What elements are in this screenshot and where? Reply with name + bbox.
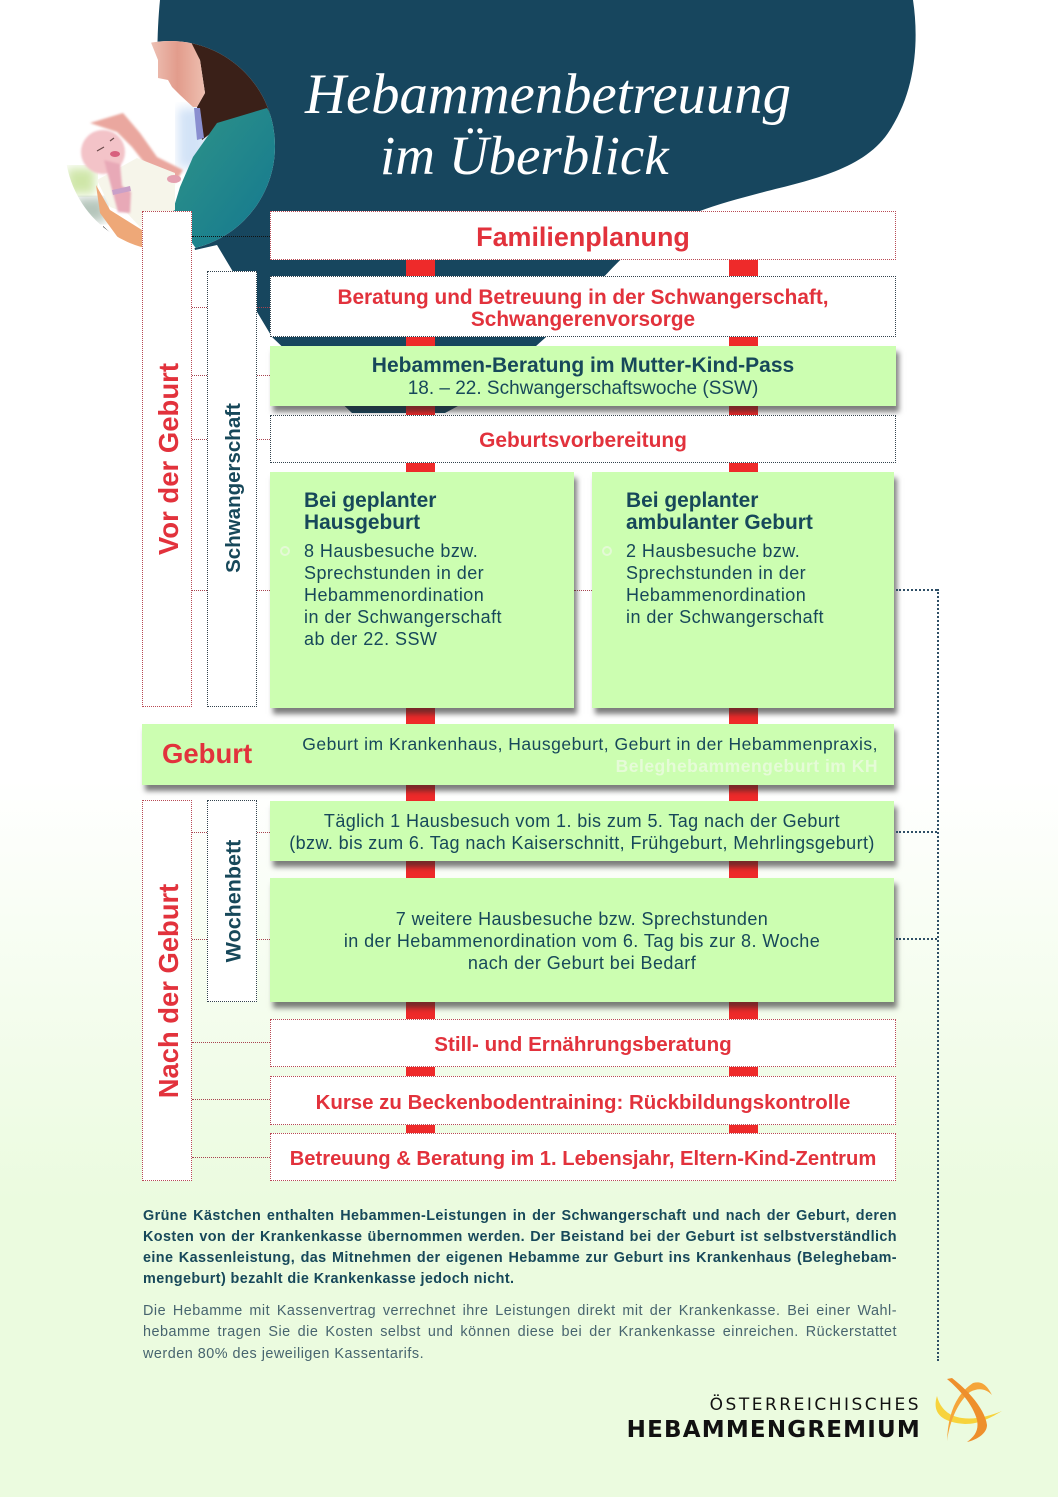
title xyxy=(304,63,791,186)
box: 7 weitere Hausbesuche: in der Hebammenordination vom 6. Tag bis zur 8. Woche xyxy=(344,931,820,951)
box: Hebammen-Beratung: Hebammen-Beratung im Mutter-Kind-Pass xyxy=(372,354,794,377)
box: tägliche Hausbesuche xyxy=(270,801,894,861)
heading: Geburt: Geburt xyxy=(162,738,252,769)
box: Beratung und Betreuung: Schwangerenvorsorge xyxy=(471,308,695,331)
header blob xyxy=(158,0,916,413)
box: Beratung und Betreuung: Beratung und Betreuung in der Schwangerschaft, xyxy=(337,286,829,309)
heading: ambulante Geburt: ambulanter Geburt xyxy=(626,511,813,534)
text: cost note xyxy=(143,1303,897,1362)
heading: Hausgeburt: Bei geplanter xyxy=(304,489,436,512)
icon: bullet xyxy=(280,546,290,556)
text: bold note: eine Kassenleistung, das Mitnehmen der eigenen Hebamme zur Geburt ins Krankenhaus (Beleghebam- xyxy=(143,1250,897,1266)
title: im Überblick xyxy=(380,125,669,186)
panel: geplante Hausgeburt xyxy=(270,472,574,708)
box: Geburtsvorbereitung: Geburtsvorbereitung xyxy=(479,429,687,452)
text: cost note: Die Hebamme mit Kassenvertrag verrechnet ihre Leistungen direkt mit der Krankenkasse. Bei einer Wahl- xyxy=(143,1303,897,1319)
box: Betreuung xyxy=(270,1133,896,1181)
side panel: Vor der Geburt: Vor der Geburt xyxy=(153,363,184,555)
text: Hausgeburt xyxy=(304,541,502,649)
box: Kurse xyxy=(270,1076,896,1125)
heading: ambulante Geburt xyxy=(626,489,813,534)
text: bold note: Kosten von der Krankenkasse übernommen werden. Der Beistand bei der Geburt ist selbstverständlich xyxy=(143,1229,897,1245)
text: Hausgeburt: in der Schwangerschaft xyxy=(304,607,502,627)
side panel: Nach der Geburt xyxy=(142,800,192,1181)
text: ambulante Geburt: Hebammenordination xyxy=(626,585,806,605)
box: Geburtsvorbereitung xyxy=(270,415,896,463)
logo text: HEBAMMENGREMIUM xyxy=(627,1417,921,1443)
box: Familienplanung xyxy=(270,211,896,260)
box: Betreuung: Betreuung & Beratung im 1. Lebensjahr, Eltern-Kind-Zentrum xyxy=(290,1148,876,1170)
heading: Hausgeburt: Hausgeburt xyxy=(304,511,420,534)
text: Geburt options xyxy=(302,734,878,776)
side panel: Vor der Geburt xyxy=(142,211,192,707)
side panel: Nach der Geburt: Nach der Geburt xyxy=(153,884,184,1098)
text: bold note: Grüne Kästchen enthalten Hebammen-Leistungen in der Schwangerschaft und nach der Geburt, deren xyxy=(143,1208,897,1224)
photo: midwife with newborn xyxy=(67,41,275,248)
text: cost note: werden 80% des jeweiligen Kassentarifs. xyxy=(143,1346,424,1362)
text: Hausgeburt: Sprechstunden in der xyxy=(304,563,484,583)
logo text: ÖSTERREICHISCHES xyxy=(710,1395,921,1415)
text: ambulante Geburt xyxy=(626,541,824,627)
text: bold note: mengeburt) bezahlt die Krankenkasse jedoch nicht. xyxy=(143,1271,514,1287)
text: cost note: hebamme tragen Sie die Kosten selbst und können diese bei der Krankenkasse einreichen. Rückerstattet xyxy=(143,1324,897,1340)
heading: Hausgeburt xyxy=(304,489,436,534)
side panel: Schwangerschaft xyxy=(207,271,257,707)
box: 7 weitere Hausbesuche: nach der Geburt bei Bedarf xyxy=(468,953,696,973)
side panel: Schwangerschaft: Schwangerschaft xyxy=(222,403,244,573)
text: ambulante Geburt: Sprechstunden in der xyxy=(626,563,806,583)
box: 7 weitere Hausbesuche xyxy=(270,878,894,1002)
box: Still- und Ernährungsberatung: Still- und Ernährungsberatung xyxy=(434,1033,732,1056)
panel: geplante ambulante Geburt xyxy=(592,472,894,708)
text: Geburt options: Beleghebammengeburt im KH xyxy=(616,756,878,776)
title: Hebammenbetreuung xyxy=(305,63,791,126)
side panel: Wochenbett: Wochenbett xyxy=(221,840,245,962)
text: ambulante Geburt: 2 Hausbesuche bzw. xyxy=(626,541,800,561)
box: Kurse: Kurse zu Beckenbodentraining: Rückbildungskontrolle xyxy=(316,1091,850,1114)
text: ambulante Geburt: in der Schwangerschaft xyxy=(626,607,824,627)
box: tägliche Hausbesuche: (bzw. bis zum 6. Tag nach Kaiserschnitt, Frühgeburt, Mehrlingsgeburt) xyxy=(289,833,875,853)
box: Hebammen-Beratung: 18. – 22. Schwangerschaftswoche (SSW) xyxy=(408,378,758,399)
heading: ambulante Geburt: Bei geplanter xyxy=(626,489,758,512)
side panel: Wochenbett xyxy=(207,800,257,1002)
box: Still- und Ernährungsberatung xyxy=(270,1019,896,1067)
logo text xyxy=(627,1394,921,1443)
box: tägliche Hausbesuche: Täglich 1 Hausbesuch vom 1. bis zum 5. Tag nach der Geburt xyxy=(324,811,840,831)
box: 7 weitere Hausbesuche: 7 weitere Hausbesuche bzw. Sprechstunden xyxy=(396,909,768,929)
box: Familienplanung: Familienplanung xyxy=(476,222,690,252)
icon: bullet xyxy=(602,546,612,556)
logo mark xyxy=(936,1378,1002,1442)
box: Hebammen-Beratung xyxy=(270,346,896,406)
bracket: right dotted connector xyxy=(896,589,939,1361)
text: Hausgeburt: 8 Hausbesuche bzw. xyxy=(304,541,478,561)
text: Geburt options: Geburt im Krankenhaus, Hausgeburt, Geburt in der Hebammenpraxis, xyxy=(302,734,878,754)
text: Hausgeburt: Hebammenordination xyxy=(304,585,484,605)
text: bold note xyxy=(143,1208,897,1287)
panel: Geburt xyxy=(142,724,894,785)
box: Beratung und Betreuung xyxy=(270,276,896,337)
text: Hausgeburt: ab der 22. SSW xyxy=(304,629,437,649)
